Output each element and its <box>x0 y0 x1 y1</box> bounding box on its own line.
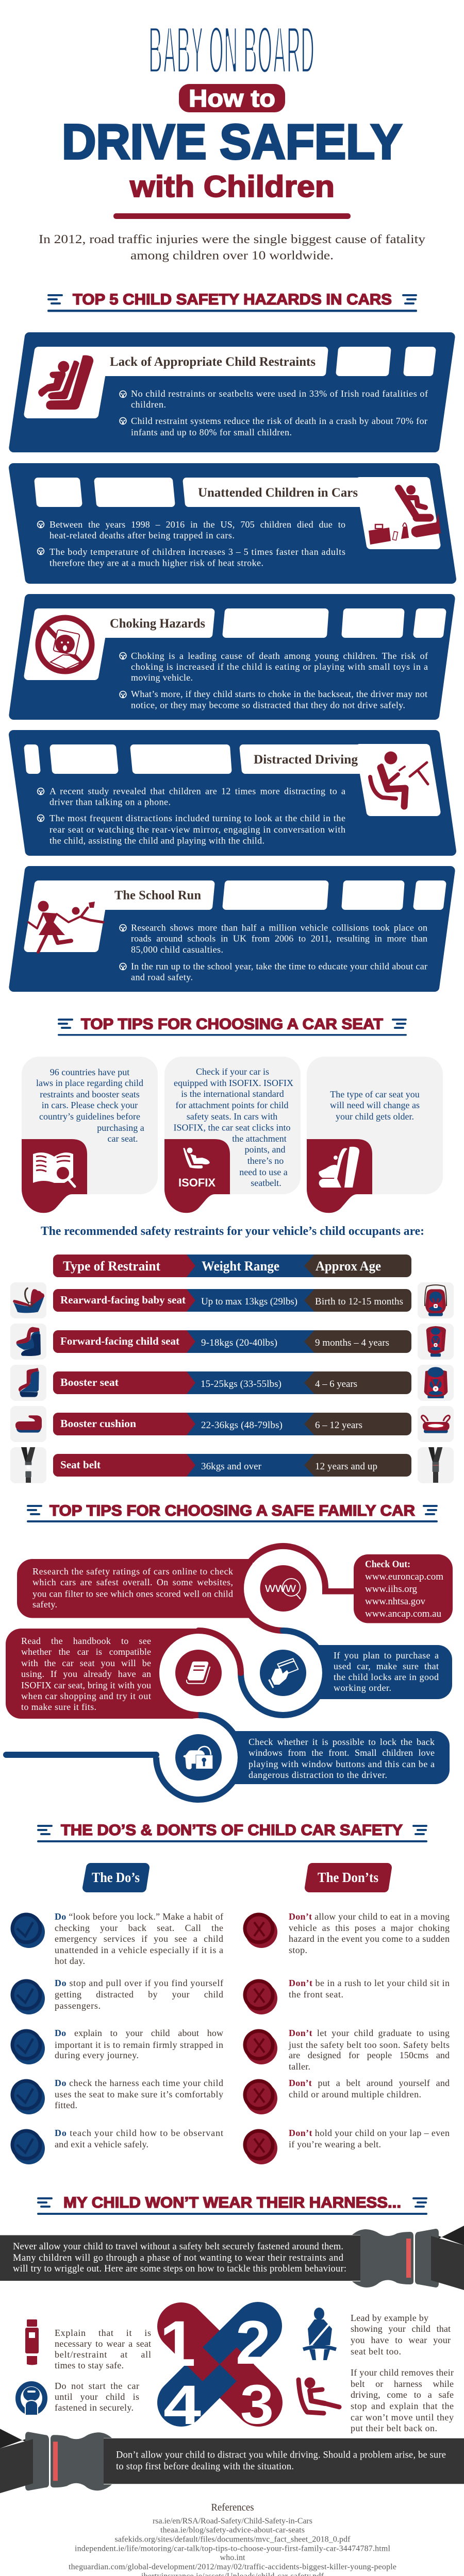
bullets: Research shows more than half a million vehicle collisions took place on <box>131 922 427 933</box>
don't item 3 <box>243 2028 450 2072</box>
numbered cross graphic <box>160 2308 274 2436</box>
panel: lack of child restraints <box>13 337 451 448</box>
don't item 5 <box>243 2128 450 2164</box>
seat belt banner: intro: Never allow your child to travel without a safety belt securely fastened around them. <box>13 2242 343 2252</box>
table row: forward-facing child seat: 9 months – 4 years <box>315 1337 389 1348</box>
title: with Children: with Children <box>129 170 335 204</box>
seat belt banner: distraction: to stop first before dealing with the situation. <box>116 2462 294 2472</box>
bullets: No child restraints or seatbelts were used in 33% of Irish road fatalities of <box>131 388 428 399</box>
text: you have to wear your <box>351 2335 451 2345</box>
table row: booster seat: Booster seat <box>60 1376 119 1388</box>
numbered cross graphic: 1 <box>160 2308 196 2380</box>
references: References <box>211 2502 254 2513</box>
text <box>32 1566 233 1609</box>
do item 1 <box>10 1911 223 1966</box>
text <box>330 1089 420 1122</box>
bullets: Between the years 1998 – 2016 in the US, 705 children died due to <box>49 519 345 530</box>
text <box>174 1066 293 1188</box>
bullets: roads around schools in UK from 2006 to 2011, resulting in more than <box>131 934 427 944</box>
table row: booster seat: 15-25kgs (33-55lbs) <box>201 1379 281 1389</box>
table row: rearward-facing baby seat: Rearward-facing baby seat <box>60 1294 186 1306</box>
do item 3: important it is to remain firmly strapped in <box>55 2040 223 2050</box>
label: ISOFIX: ISOFIX <box>178 1176 216 1189</box>
text: Check whether it is possible to lock the back <box>248 1737 435 1747</box>
icon: booster front <box>418 1365 454 1401</box>
bullets: rear seat or watching the rear-view mirror, engaging in conversation with <box>49 824 345 835</box>
heading: Choking Hazards <box>110 617 205 631</box>
text: 96 countries have put <box>50 1067 129 1077</box>
references: theaa.ie/blog/safety-advice-about-car-seats <box>160 2526 305 2535</box>
bullets: choking is increased if the child is eating or playing with small toys in a <box>131 662 428 672</box>
icon: no choking <box>38 618 92 671</box>
text: is the international standard <box>181 1089 284 1099</box>
don't item 1: vehicle as this poses a major choking <box>289 1923 450 1933</box>
bullets: infants and up to 80% for small children. <box>131 427 292 437</box>
do item 4: uses the seat to make sure it’s comfortably <box>55 2089 223 2099</box>
text: put their belt back on. <box>351 2423 437 2433</box>
bullets: therefore they are at a much higher risk of heat stroke. <box>49 557 263 568</box>
icon: cushion front <box>418 1406 454 1442</box>
text: the child locks are in good <box>334 1672 439 1682</box>
text: seatbelt. <box>251 1178 281 1188</box>
check out list: Check Out: <box>365 1559 410 1570</box>
bullets: The most frequent distractions included turning to look at the child in the <box>49 813 345 823</box>
don't item 5: Don’t hold your child on your lap – even <box>289 2128 450 2138</box>
icon: buckle <box>25 2319 39 2365</box>
text: The type of car seat you <box>330 1089 420 1099</box>
button: the do's: The Do’s <box>92 1870 140 1885</box>
panel: unattended children <box>13 468 452 579</box>
text: showing your child that <box>351 2324 451 2334</box>
text: ISOFIX, the car seat clicks into <box>174 1122 290 1132</box>
text <box>55 2381 139 2413</box>
title rule <box>113 213 351 219</box>
icon: booster side <box>10 1365 46 1401</box>
card: changing seat <box>307 1057 443 1213</box>
numbered cross graphic: 4 <box>163 2374 201 2436</box>
card: country laws <box>22 1057 158 1213</box>
icon: hand with card <box>260 1650 306 1696</box>
do item 2: getting distracted by your child <box>55 1989 223 1999</box>
panel: the school run <box>13 871 451 987</box>
tip: window locks <box>3 1715 450 1800</box>
icon: child and bags <box>369 485 441 545</box>
icon: car with padlock <box>175 1734 222 1781</box>
icon: www search: www <box>264 1581 296 1595</box>
text: Read the handbook to see <box>21 1636 151 1646</box>
check out list: www.iihs.org <box>365 1584 418 1595</box>
button: the don'ts: The Don’ts <box>318 1870 378 1885</box>
text: car won’t move until they <box>351 2412 454 2422</box>
text: using. If you already have an <box>21 1669 151 1679</box>
text: Check if your car is <box>196 1066 269 1077</box>
text: to make sure it fits. <box>21 1702 96 1712</box>
table row: seat belt: Seat belt <box>60 1459 101 1471</box>
text: which cars are safest overall. On some websites, <box>32 1577 233 1587</box>
text: purchasing a <box>97 1123 144 1133</box>
text: your child gets older. <box>336 1111 414 1122</box>
text: laws in place regarding child <box>36 1078 143 1088</box>
icon: woman and child running <box>28 901 103 952</box>
step: do not start <box>18 2381 139 2415</box>
don't item 3: are designed for people 150cms and <box>289 2050 450 2060</box>
tip: research safety ratings <box>17 1546 453 1631</box>
do item 5: Do teach your child how to be observant <box>55 2128 223 2138</box>
seat belt banner: intro <box>0 2226 464 2290</box>
text: for attachment points for child <box>176 1100 288 1110</box>
references: rsa.ie/en/RSA/Road-Safety/Child-Safety-in-Cars <box>153 2517 312 2526</box>
bullets <box>120 388 428 437</box>
text: there’s no <box>247 1156 284 1166</box>
text <box>36 1067 144 1144</box>
don't item 3: taller. <box>289 2061 310 2072</box>
text: Lead by example by <box>351 2313 428 2323</box>
text: used car, make sure that <box>334 1661 439 1671</box>
do item 1: unattended in a vehicle especially if it is a <box>55 1945 223 1955</box>
do item 4: fitted. <box>55 2100 77 2110</box>
text: working order. <box>334 1683 391 1693</box>
table header <box>53 1255 411 1277</box>
table row: booster cushion: 6 – 12 years <box>315 1420 362 1431</box>
bullets: the child, assisting the child and playing with the child. <box>49 836 264 846</box>
heading: harness: MY CHILD WON’T WEAR THEIR HARNESS... <box>63 2194 401 2211</box>
text <box>248 1737 435 1780</box>
do item 1: emergency services if you see a child <box>55 1934 223 1944</box>
bullets: A recent study revealed that children are 12 times more distracting to a <box>49 786 345 796</box>
text: Explain that it is <box>55 2328 151 2338</box>
text: need to use a <box>239 1167 288 1177</box>
do item 1: checking your back seat. Call the <box>55 1923 223 1933</box>
bullets: heat-related deaths after being trapped in cars. <box>49 530 235 540</box>
don't item 4: child or around multiple children. <box>289 2089 421 2099</box>
panel: choking hazards <box>13 599 451 715</box>
table row: forward-facing child seat: 9-18kgs (20-40lbs) <box>201 1337 277 1348</box>
don't item 1: hazard in the event you come to a sudden <box>289 1934 450 1944</box>
table header: Weight Range <box>202 1259 279 1274</box>
do item 3: Do explain to your child about how <box>55 2028 223 2038</box>
button: the don'ts <box>309 1868 387 1888</box>
icon: www search <box>260 1565 306 1612</box>
table row: forward-facing child seat: Forward-facing child seat <box>60 1335 179 1347</box>
table header: Approx Age <box>316 1259 381 1274</box>
bullets: 85,000 child casualties. <box>131 944 223 955</box>
step: lead by example <box>303 2308 451 2360</box>
text: the attachment <box>232 1133 287 1144</box>
don't item 2: Don’t be in a rush to let your child sit in <box>289 1978 450 1988</box>
table row: booster cushion: 22-36kgs (48-79lbs) <box>201 1420 283 1431</box>
text: in cars. Please check your <box>42 1100 138 1110</box>
icon: unfastened belt <box>10 1447 46 1483</box>
table row: seat belt: 12 years and up <box>315 1461 377 1472</box>
table row: rearward-facing baby seat: Up to max 13kgs (29lbs) <box>201 1296 297 1307</box>
bullets <box>120 922 427 982</box>
table row: rearward-facing baby seat <box>53 1289 411 1312</box>
table row: booster cushion: Booster cushion <box>60 1417 136 1430</box>
don't item 2: the front seat. <box>289 1989 343 1999</box>
heading: Unattended Children in Cars <box>198 486 358 500</box>
text: ISOFIX car seat, bring it with you <box>21 1680 151 1690</box>
intro text: In 2012, road traffic injuries were the single biggest cause of fatality <box>39 233 425 246</box>
text: equipped with ISOFIX. ISOFIX <box>174 1078 293 1088</box>
text: points, and <box>244 1144 286 1155</box>
heading: harness <box>37 2194 427 2215</box>
text: If your child removes their <box>351 2367 454 2378</box>
text: with the car seat you will be <box>21 1658 151 1668</box>
check out list: www.nhtsa.gov <box>365 1596 426 1607</box>
don't item 4: Don’t put a belt around yourself and <box>289 2078 450 2088</box>
intro text <box>39 233 425 263</box>
icon: child seat <box>299 2377 339 2413</box>
bullets: notice, or they may become so distracted that they do not drive safely. <box>131 700 405 710</box>
tip: purchase used car <box>241 1631 452 1715</box>
table row: forward-facing child seat <box>53 1330 411 1353</box>
step: if child removes belt <box>299 2367 454 2433</box>
table row: rearward-facing baby seat: Birth to 12-15 months <box>315 1296 403 1307</box>
do item 1: hot day. <box>55 1956 85 1966</box>
text: car seat. <box>108 1133 138 1144</box>
table row: booster seat <box>53 1371 411 1394</box>
icon: cushion side <box>10 1406 46 1442</box>
seat belt banner: distraction: Don’t allow your child to distract you while driving. Should a problem arise, be sure <box>116 2450 446 2461</box>
check out list <box>354 1554 453 1623</box>
text: times to stay safe. <box>55 2360 124 2370</box>
icon: baby seat side <box>10 1282 46 1318</box>
numbered cross graphic: 3 <box>240 2373 274 2435</box>
text: when car shopping and try it out <box>21 1691 151 1701</box>
heading: top 5 hazards: TOP 5 CHILD SAFETY HAZARDS IN CARS <box>73 291 392 308</box>
bullets: children. <box>131 399 166 410</box>
title: Drive Safely: DRIVE SAFELY <box>62 114 402 170</box>
text: restraints and booster seats <box>40 1089 140 1099</box>
icon: baby seat front <box>418 1282 454 1318</box>
do item 2: Do stop and pull over if you find yourself <box>55 1978 223 1988</box>
numbered cross graphic: 2 <box>236 2308 271 2377</box>
icon: fastened belt <box>418 1447 454 1483</box>
do item 5: and exit a vehicle safely. <box>55 2139 148 2149</box>
text: whether the car is compatible <box>21 1647 151 1657</box>
title: Baby on Board: BABY ON BOARD <box>148 11 314 90</box>
bullets: The body temperature of children increases 3 – 5 times faster than adults <box>49 547 345 557</box>
do item 1: Do “look before you lock.” Make a habit of <box>55 1911 223 1922</box>
references: theguardian.com/global-development/2012/may/02/traffic-accidents-biggest-killer-young-people <box>69 2563 396 2571</box>
don't item 5: if you’re wearing a belt. <box>289 2139 381 2149</box>
seat belt banner: intro: will try to wriggle out. Here are some steps on how to tackle this problem behaviour: <box>13 2264 346 2274</box>
text: country’s guidelines before <box>39 1111 140 1122</box>
text: safety seats. In cars with <box>187 1111 277 1122</box>
text: fastened in securely. <box>55 2402 134 2413</box>
text: belt/restraint at all <box>55 2349 151 2360</box>
don't item 3: Don’t let your child graduate to using <box>289 2028 450 2038</box>
bullets <box>120 651 428 710</box>
do item 4 <box>10 2078 223 2114</box>
text: dangerous distraction to the driver. <box>248 1770 387 1780</box>
text <box>334 1650 439 1693</box>
icon: book <box>175 1650 222 1696</box>
text: you can filter to see which ones scored well on child <box>32 1589 233 1599</box>
text: windows from the front. Small children love <box>248 1748 435 1758</box>
don't item 1: Don’t allow your child to eat in a moving <box>289 1911 450 1922</box>
text: stop and explain that the <box>351 2401 454 2411</box>
icon: book and magnifier <box>33 1153 75 1187</box>
do item 2: passengers. <box>55 2001 101 2011</box>
bullets: In the run up to the school year, take the time to educate your child about car <box>131 961 427 972</box>
icon: isofix seat <box>183 1148 210 1168</box>
icon: forward seat front <box>418 1324 454 1360</box>
references: independent.ie/life/motoring/car-talk/top-tips-to-choose-your-first-family-car-34474787.html <box>75 2544 391 2553</box>
text: safety. <box>32 1599 57 1609</box>
heading: top 5 hazards <box>47 291 417 312</box>
text <box>21 1636 151 1712</box>
heading: The School Run <box>114 888 201 903</box>
icon: car seat <box>319 1147 359 1188</box>
text: belt or harness while <box>351 2379 454 2389</box>
references <box>69 2502 396 2576</box>
table row: booster seat: 4 – 6 years <box>315 1379 357 1389</box>
seat belt banner: intro: Many children will go through a phase of not wanting to wear their restraints and <box>13 2253 344 2263</box>
panel: distracted driving <box>13 735 452 851</box>
text <box>351 2367 454 2433</box>
heading: do's and don'ts: THE DO’S & DON’TS OF CHILD CAR SAFETY <box>61 1822 403 1839</box>
tip: handbook <box>6 1629 241 1719</box>
icon: belted adult <box>303 2308 336 2360</box>
do item 3 <box>10 2028 223 2064</box>
heading: safe family car: TOP TIPS FOR CHOOSING A SAFE FAMILY CAR <box>49 1502 415 1519</box>
text: If you plan to purchase a <box>334 1650 439 1660</box>
bullets: Child restraint systems reduce the risk of death in a crash by about 70% for <box>131 416 427 426</box>
icon: ignition <box>18 2384 45 2415</box>
icon: child in seat <box>38 355 93 410</box>
do item 3: during every journey. <box>55 2050 139 2060</box>
text: necessary to wear a seat <box>55 2338 151 2349</box>
don't item 3: just the safety belt too soon. Safety belts <box>288 2040 450 2050</box>
table row: seat belt <box>53 1454 411 1477</box>
references: safekids.org/sites/default/files/documents/mvc_fact_sheet_2018_0.pdf <box>114 2535 351 2544</box>
references: who.int <box>220 2553 245 2562</box>
bullets <box>38 519 345 568</box>
bullets: and road safety. <box>131 972 193 982</box>
don't item 1 <box>243 1911 450 1955</box>
do item 5 <box>10 2128 223 2164</box>
text: playing with window buttons and this can be a <box>248 1759 435 1769</box>
heading: Distracted Driving <box>254 753 358 767</box>
do item 4: Do check the harness each time your child <box>55 2078 223 2088</box>
intro text: among children over 10 worldwide. <box>130 249 334 263</box>
don't item 4 <box>243 2078 450 2114</box>
text: until your child is <box>55 2392 139 2402</box>
table row: seat belt: 36kgs and over <box>201 1461 262 1472</box>
do item 2 <box>10 1978 223 2014</box>
text: driving, come to a safe <box>351 2389 454 2400</box>
heading: Lack of Appropriate Child Restraints <box>110 355 316 369</box>
bullets: Choking is a leading cause of death among young children. The risk of <box>131 651 428 661</box>
step: explain <box>25 2319 151 2370</box>
table header: Type of Restraint <box>63 1259 160 1274</box>
subheading: recommended restraints: The recommended safety restraints for your vehicle’s child occupants are: <box>41 1225 424 1238</box>
check out list: www.ancap.com.au <box>365 1608 441 1619</box>
heading: top tips car seat: TOP TIPS FOR CHOOSING A CAR SEAT <box>81 1016 383 1032</box>
text: Do not start the car <box>55 2381 139 2391</box>
text: seat belt too. <box>351 2346 401 2357</box>
seat belt banner: distraction <box>0 2429 464 2493</box>
card: isofix <box>164 1057 301 1213</box>
text: will need will change as <box>330 1100 420 1110</box>
icon: distracted driver <box>370 751 428 806</box>
bullets: What’s more, if they child starts to choke in the backseat, the driver may not <box>131 689 427 699</box>
text: Research the safety ratings of cars online to check <box>32 1566 233 1577</box>
pill: How to: How to <box>189 84 275 112</box>
check out list: www.euroncap.com <box>365 1571 443 1582</box>
icon: forward seat side <box>10 1324 46 1360</box>
table row: booster cushion <box>53 1413 411 1435</box>
don't item 2 <box>243 1978 450 2014</box>
text <box>55 2328 151 2370</box>
bullets: driver than talking on a phone. <box>49 796 171 807</box>
bullets <box>38 786 345 846</box>
don't item 1: stop. <box>289 1945 307 1955</box>
text <box>351 2313 451 2357</box>
bullets: moving vehicle. <box>131 672 193 683</box>
